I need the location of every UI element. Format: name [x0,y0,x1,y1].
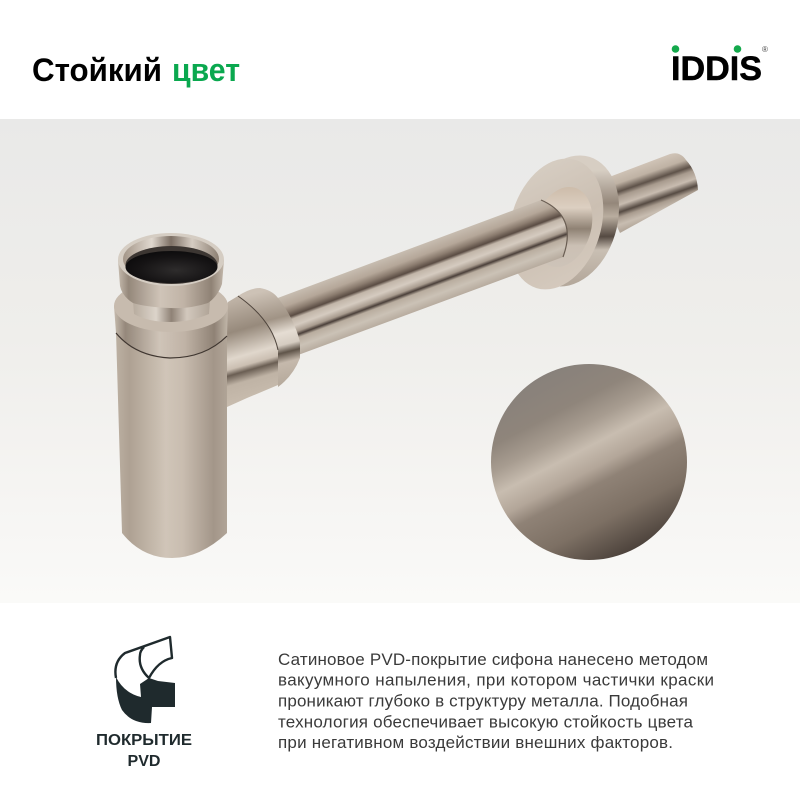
label: PVD coating [96,732,192,770]
label: PVD coating: ПОКРЫТИЕ [96,732,192,749]
sphere swatch [491,364,687,560]
description text: вакуумного напыления, при котором частички краски [278,670,714,690]
description text: Сатиновое PVD-покрытие сифона нанесено методом [278,650,708,669]
trap body cylinder [116,332,227,558]
icon: PVD coating [115,637,175,723]
photo background [0,119,800,603]
description text: проникают глубоко в структуру металла. Подобная [278,692,688,710]
title: цвет [172,52,240,88]
elbow connector [200,288,300,420]
horizontal tube [275,200,567,358]
description text: технология обеспечивает высокую стойкость цвета [278,712,694,732]
logo: IDDIS: IDDIS [671,50,762,88]
title: Стойкий [32,52,162,88]
photo: product on light background [0,119,800,603]
logo: IDDIS: ® [762,45,768,54]
description text [278,650,714,752]
description text: при негативном воздействии внешних факторов. [278,733,673,752]
wall flange [493,143,635,301]
neck [133,300,210,322]
title [32,52,240,88]
label: PVD coating: PVD [128,753,160,770]
tube end behind flange [596,153,698,233]
top ring with opening [118,233,224,308]
collar [114,280,228,358]
